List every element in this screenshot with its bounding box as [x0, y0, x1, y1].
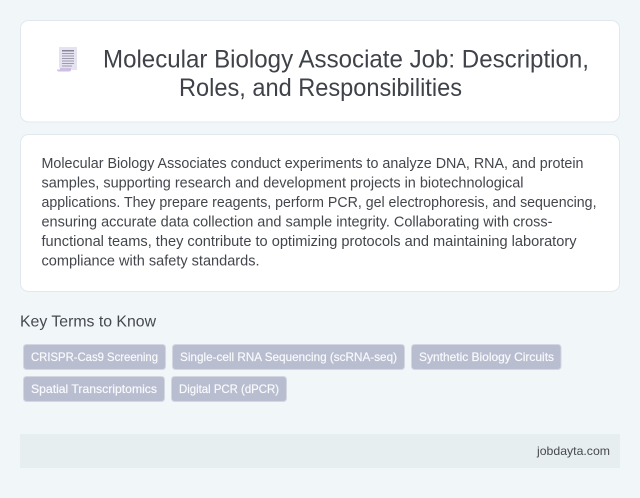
- title: Molecular Biology Associate Job: Description,: [103, 46, 589, 74]
- description text: compliance with safety standards.: [42, 254, 260, 270]
- tag: CRISPR-Cas9 Screening: [24, 344, 166, 370]
- title: [103, 46, 589, 102]
- footer: [20, 434, 620, 468]
- tag list: [24, 344, 561, 402]
- description text: ensuring accurate data collection and sample integrity. Collaborating with cross-: [42, 214, 553, 230]
- panel: description: [20, 134, 620, 292]
- description text: functional teams, they contribute to optimizing protocols and maintaining laboratory: [42, 234, 577, 250]
- description text: samples, supporting research and development projects in biotechnological: [42, 176, 524, 192]
- tag: Single-cell RNA Sequencing: Single-cell RNA Sequencing (scRNA-seq): [180, 350, 397, 364]
- tag: Digital PCR: [172, 376, 286, 402]
- description text: [42, 156, 596, 270]
- description text: applications. They prepare reagents, perform PCR, gel electrophoresis, and sequencing,: [42, 195, 596, 211]
- tag: Digital PCR: Digital PCR (dPCR): [179, 382, 279, 396]
- footer: jobdayta.com: [536, 444, 610, 458]
- title: Roles, and Responsibilities: [179, 74, 462, 102]
- tag: Synthetic Biology Circuits: [412, 344, 561, 370]
- tag: Synthetic Biology Circuits: Synthetic Biology Circuits: [419, 350, 554, 364]
- description text: Molecular Biology Associates conduct experiments to analyze DNA, RNA, and protein: [42, 156, 584, 172]
- tag: Spatial Transcriptomics: Spatial Transcriptomics: [31, 382, 157, 396]
- tag: CRISPR-Cas9 Screening: CRISPR-Cas9 Screening: [31, 350, 158, 364]
- heading: key terms: Key Terms to Know: [20, 314, 156, 330]
- tag: Single-cell RNA Sequencing: [172, 344, 404, 370]
- icon: document scroll: [57, 47, 77, 72]
- panel: title card: [20, 20, 620, 122]
- tag: Spatial Transcriptomics: [24, 376, 164, 402]
